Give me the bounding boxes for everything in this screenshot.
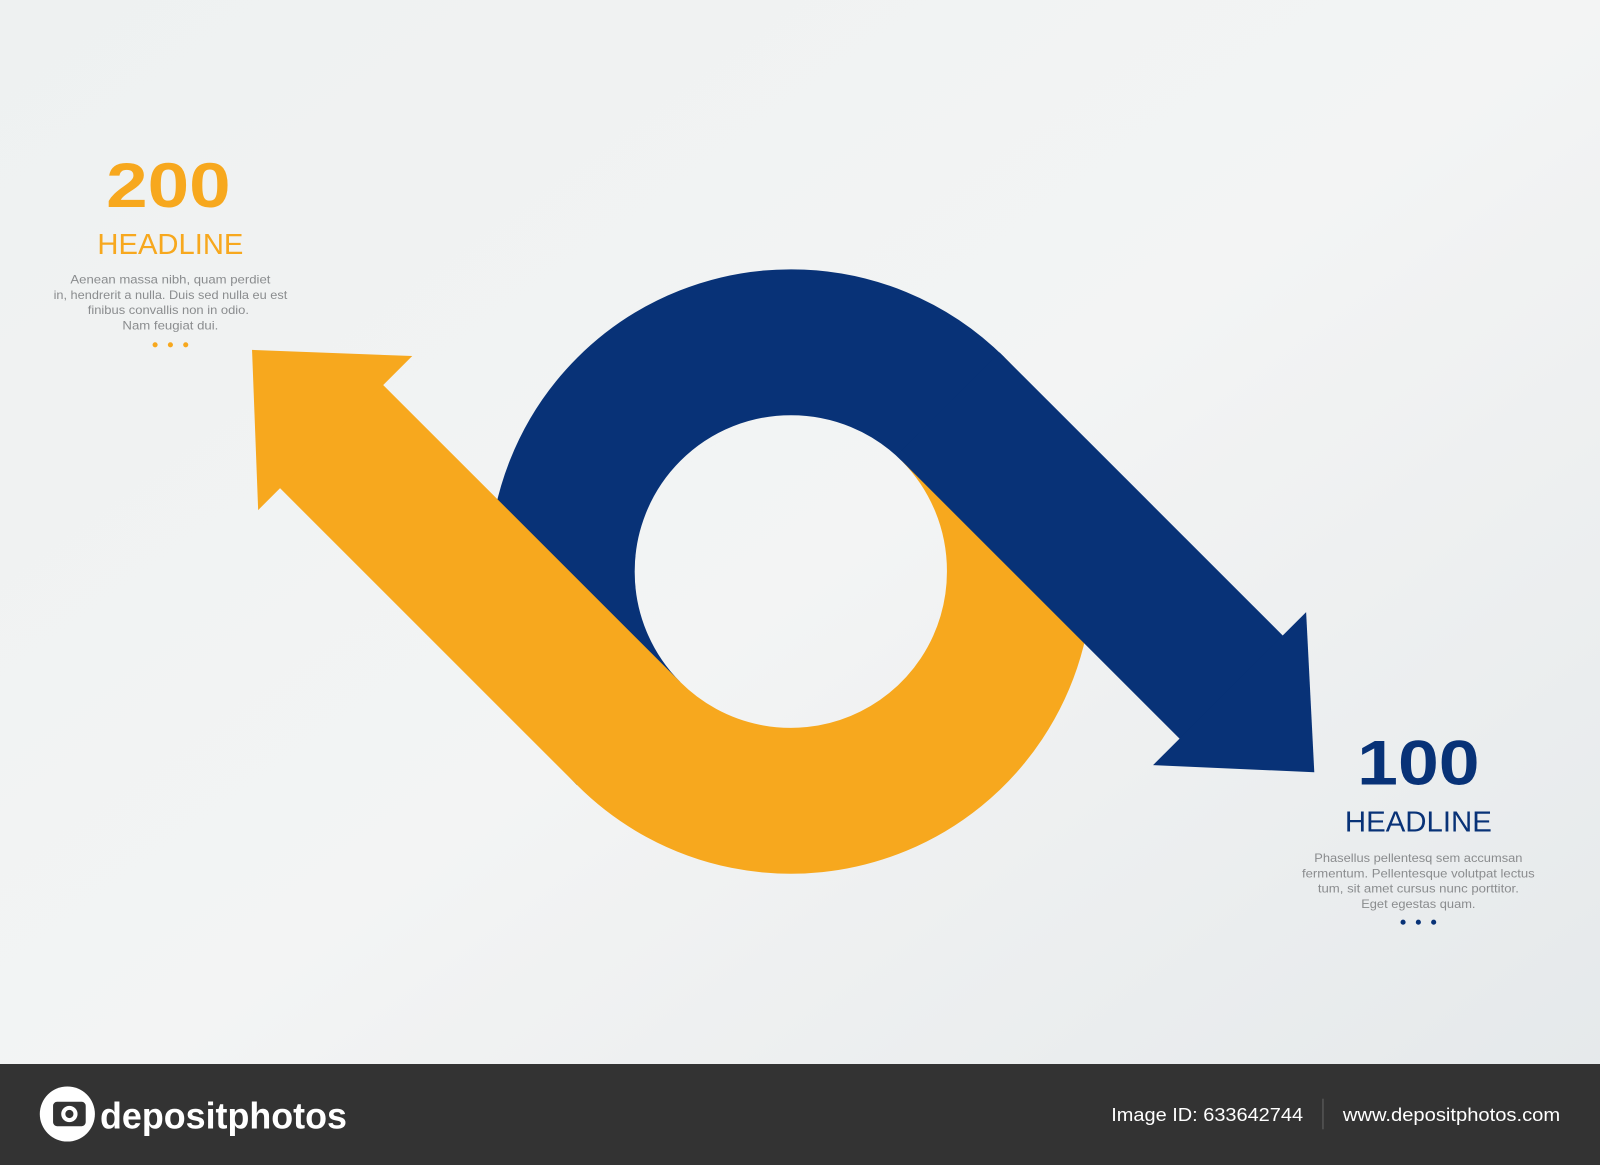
text block: 200 headline: HEADLINE [97,229,243,261]
text block: 100 headline [1302,728,1535,925]
logo text: depositphotos [100,1095,347,1136]
text block: 100 headline: 100 [1357,728,1480,798]
text block: 100 headline: tum, sit amet cursus nunc porttitor. [1318,883,1519,896]
text block: 200 headline [54,151,288,347]
blue arrow (down-right) [948,404,1314,772]
text block: 100 headline: HEADLINE [1345,806,1492,838]
text block: 200 headline: 200 [106,151,231,221]
image id: Image ID: 633642744 [1111,1104,1303,1125]
yellow arrow (up-left) [252,350,1020,801]
text block: 100 headline: fermentum. Pellentesque volutpat lectus [1302,867,1535,880]
blue arc (top half of ring) [562,342,953,733]
text block: 200 headline: finibus convallis non in odio. [88,304,249,317]
icon: camera logo [40,1086,95,1142]
text block: 100 headline: Eget egestas quam. [1361,898,1476,911]
text block: 200 headline: in, hendrerit a nulla. Duis sed nulla eu est [54,289,288,302]
footer bar [0,1064,1600,1165]
text block: 200 headline: Aenean massa nibh, quam perdiet [70,274,271,287]
text block: 200 headline: Nam feugiat dui. [122,320,218,333]
website url: www.depositphotos.com [1342,1104,1560,1125]
text block: 100 headline: Phasellus pellentesq sem accumsan [1314,852,1522,865]
